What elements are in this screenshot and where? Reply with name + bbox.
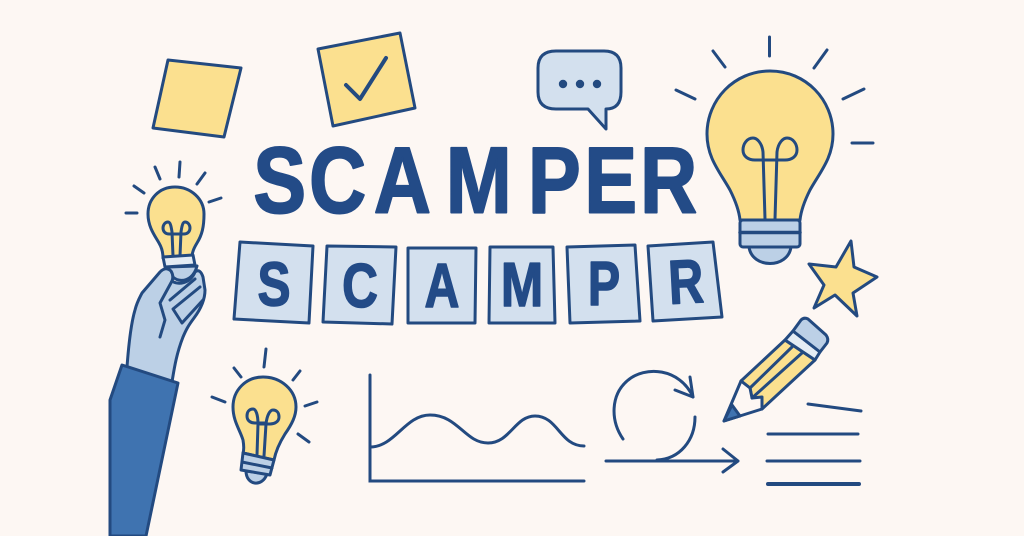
tile P: P (588, 249, 620, 318)
icon: small bulb in hand (126, 162, 221, 280)
tile P (567, 245, 640, 323)
tile R (648, 242, 722, 321)
icon: cycle arrow (606, 371, 738, 472)
icon: lower light bulb (212, 349, 317, 483)
icon: large light bulb (676, 37, 873, 264)
icon: pencil (724, 318, 828, 421)
tile C (323, 246, 396, 324)
tile C: C (342, 251, 378, 320)
tile R: R (667, 246, 705, 317)
tile M (489, 247, 555, 323)
tile M: M (501, 251, 543, 320)
tile S (234, 242, 313, 323)
icon: star (809, 241, 877, 316)
icon: hand and sleeve (110, 269, 205, 536)
title: SCAMPER (253, 128, 697, 233)
icon: speech bubble (538, 51, 621, 129)
tile S: S (257, 249, 291, 319)
tile A (408, 248, 476, 323)
line chart (370, 375, 584, 481)
tile A: A (425, 251, 459, 320)
icon: text lines (767, 404, 861, 484)
letter tiles (234, 242, 722, 324)
icon: checked sticky note (318, 33, 415, 126)
icon: yellow sticky note (153, 60, 241, 137)
